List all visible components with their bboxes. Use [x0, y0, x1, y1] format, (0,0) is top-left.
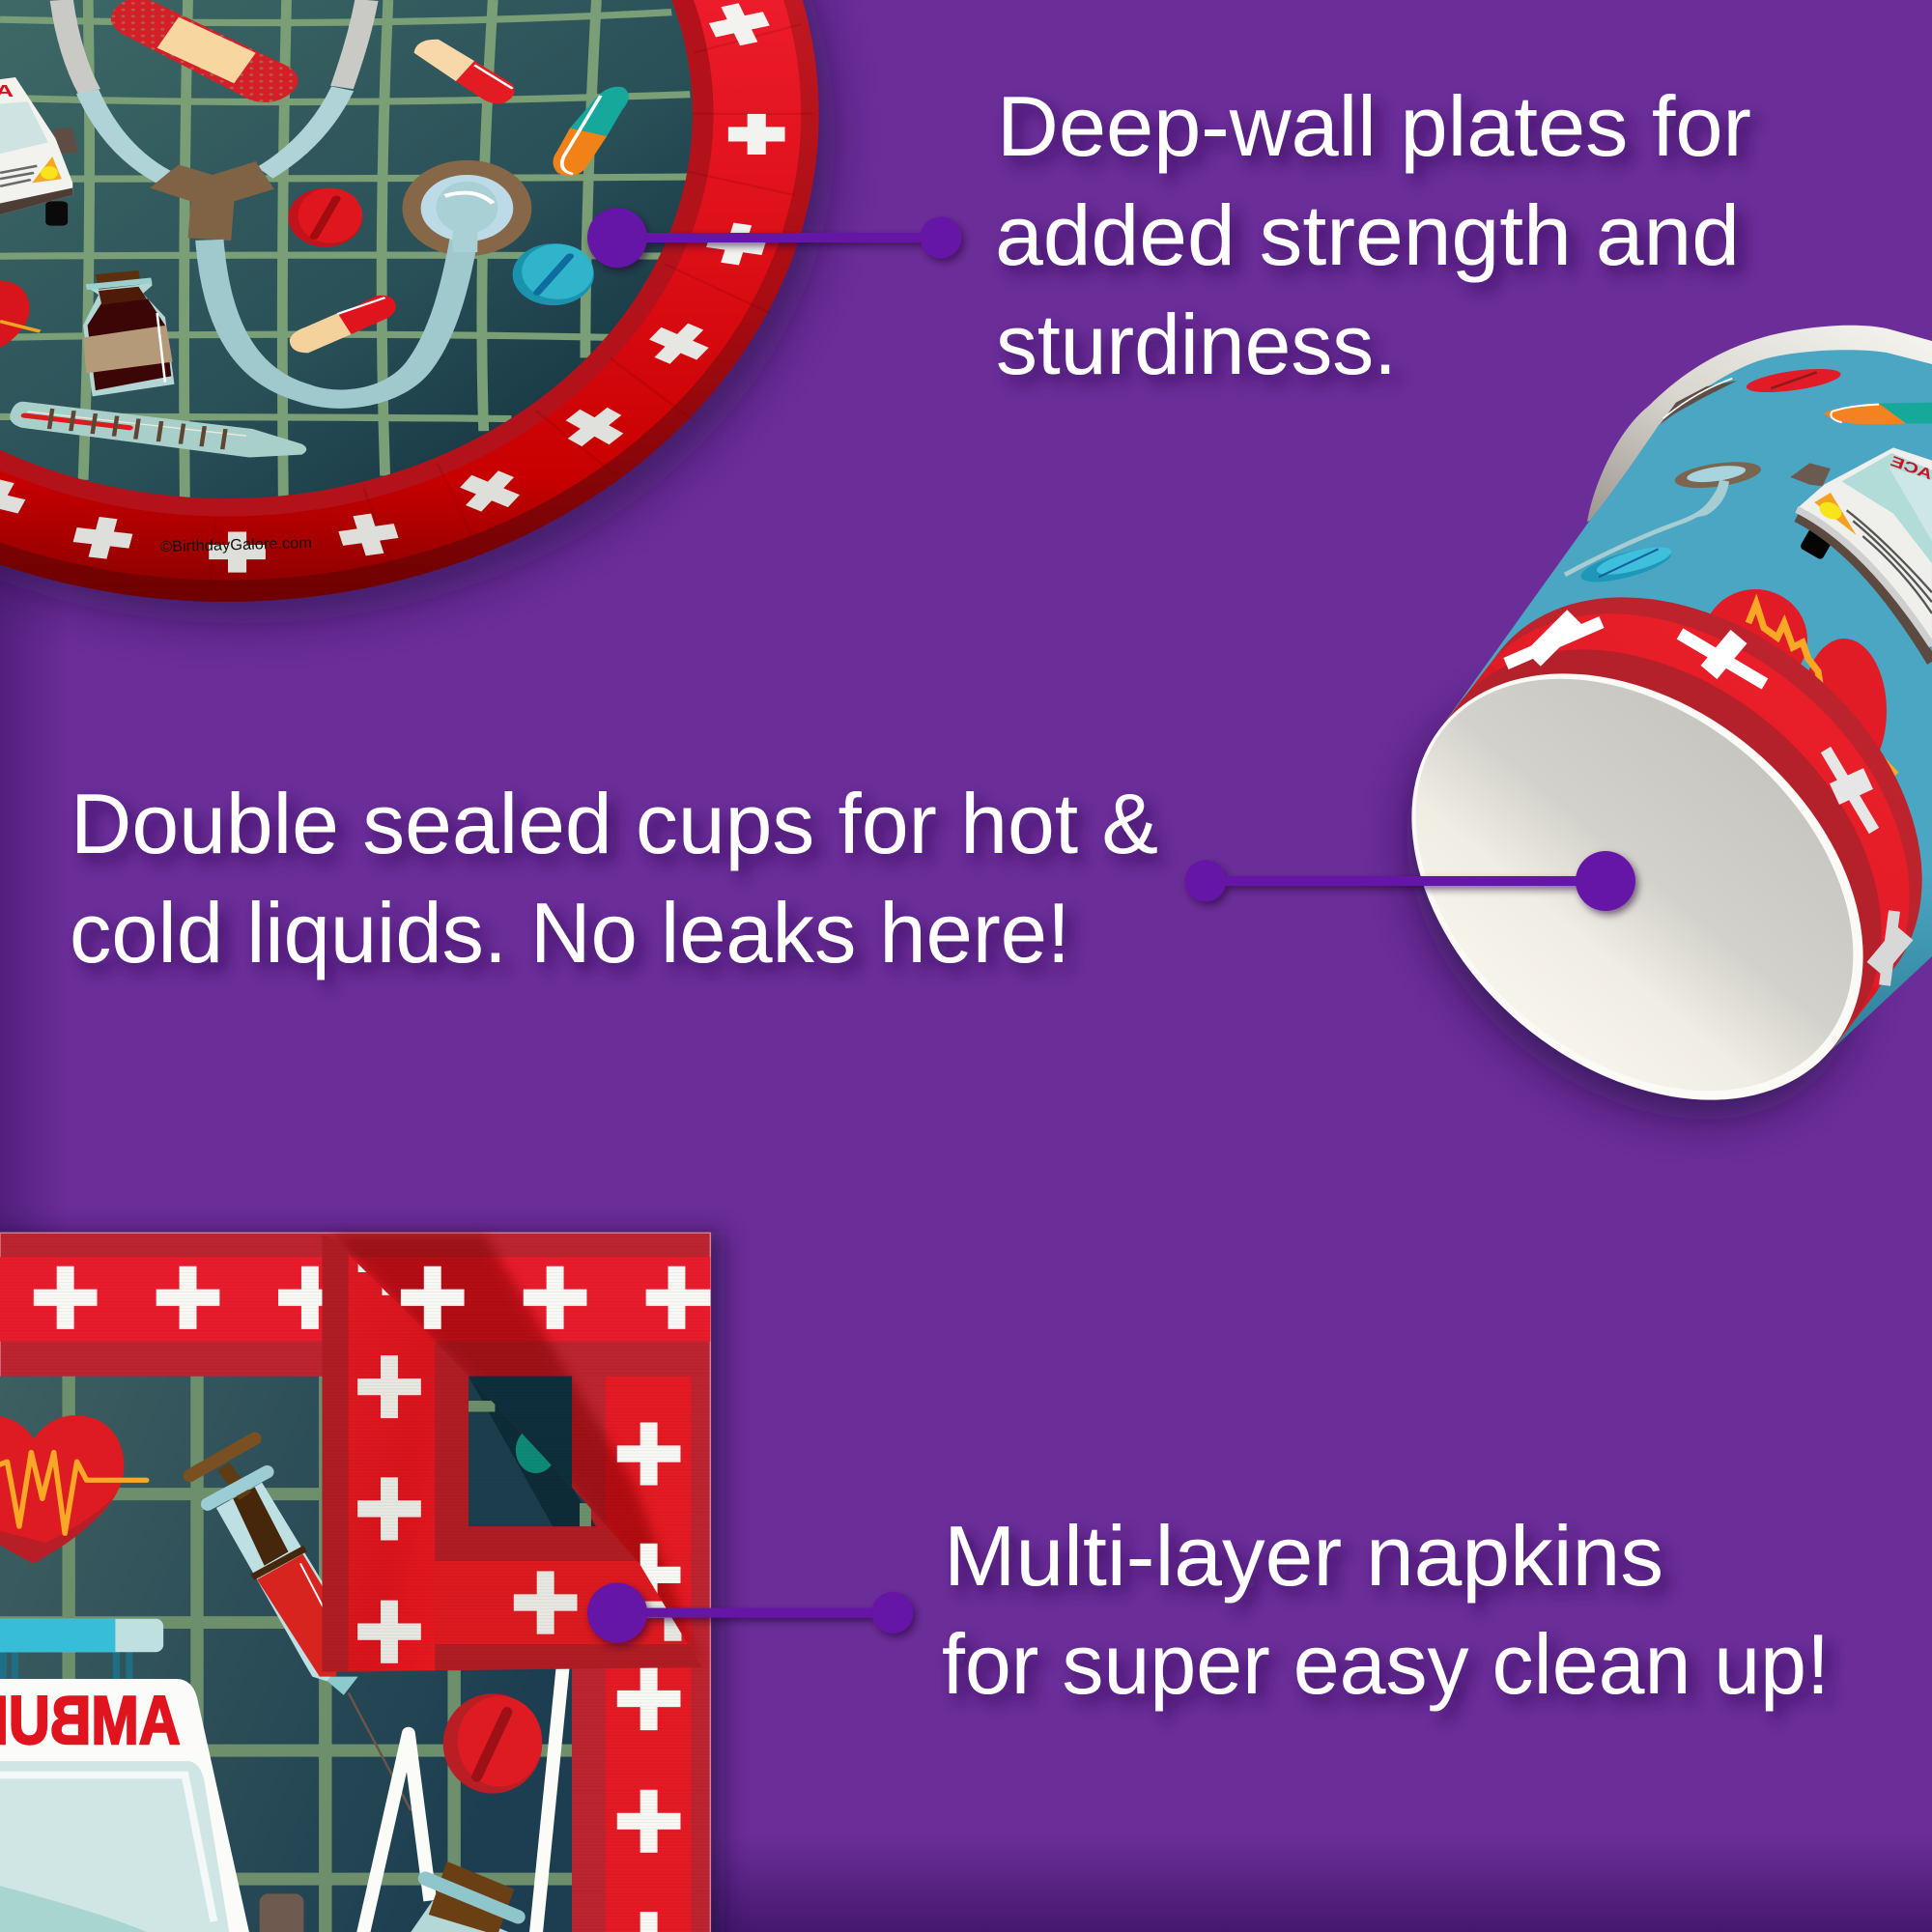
panel: paper plate: [0, 0, 835, 623]
icon: teal and orange capsule: [553, 87, 629, 176]
cup body: [1443, 350, 1932, 1050]
icon: orange capsule on cup: [1824, 403, 1932, 424]
cup base: [1328, 586, 1932, 1187]
icon: ambulance on napkin: [0, 1679, 250, 1932]
plate inner wall ring: [0, 0, 714, 517]
icon: stethoscope on cup: [1565, 458, 1763, 575]
icon: blue tablet: [513, 243, 594, 305]
icon: heart: [0, 280, 40, 348]
icon: ambulance: [0, 77, 78, 226]
text block: napkins: Multi-layer napkins: [944, 1508, 1663, 1604]
fold shadow: [331, 1236, 701, 1667]
panel: paper cup: [1323, 326, 1932, 1207]
folded napkin corner: [322, 1233, 706, 1677]
icon: heart on cup: [1703, 589, 1896, 783]
plate rim pleats: [210, 24, 813, 594]
napkin texture: [0, 1233, 710, 1932]
callout: napkin connector: [587, 1582, 914, 1642]
text block: plates: sturdiness.: [996, 297, 1397, 392]
icon: stretcher bar: [0, 1619, 163, 1680]
icon: white pulse line: [363, 1662, 563, 1932]
icon: thermometer: [10, 402, 306, 458]
callout: plate connector: [587, 208, 962, 268]
icon: bandage: [111, 0, 298, 102]
text block: plates: added strength and: [995, 187, 1740, 283]
icon: blue pill on cup: [1577, 541, 1674, 589]
dish corner behind fold: [469, 1377, 572, 1487]
icon: dark pill on cup: [1660, 379, 1737, 424]
text block: plates: [995, 78, 1751, 392]
plate outer rim: [0, 0, 819, 602]
panel: napkin: [0, 1232, 724, 1932]
cup red band: [1347, 510, 1932, 1163]
napkin shadow: [0, 1232, 724, 1932]
text block: napkins: for super easy clean up!: [942, 1616, 1830, 1712]
icon: brown mirror: [260, 1893, 303, 1932]
cup rolled rim: [1587, 326, 1932, 522]
text block: napkins: [942, 1508, 1830, 1712]
plate artwork: [0, 0, 819, 602]
cup shadow: [1323, 606, 1932, 1207]
napkin top border stripe: [0, 1257, 710, 1342]
text block: plates: Deep-wall plates for: [997, 78, 1751, 174]
plate shadow: [0, 0, 835, 623]
cup printed artwork: [1565, 364, 1932, 662]
text block: cups: Double sealed cups for hot &: [71, 776, 1158, 871]
icon: red tablet: [288, 187, 362, 246]
icon: heart with pulse: [0, 1415, 147, 1563]
plate rim crosses: [0, 0, 785, 573]
napkin right border stripe: [606, 1377, 691, 1932]
napkin artwork: [0, 1233, 710, 1932]
icon: stethoscope: [62, 0, 531, 399]
napkin right border crosses: [617, 1422, 680, 1932]
napkin top border crosses: [34, 1266, 710, 1329]
icon: syringe: [190, 1438, 411, 1810]
icon: medicine bottle: [83, 270, 174, 396]
cup band crosses: [1506, 617, 1905, 985]
napkin base: [0, 1233, 710, 1932]
text block: cups: cold liquids. No leaks here!: [70, 885, 1070, 980]
plate centre design: [0, 0, 702, 504]
plate bright rim band: [0, 0, 801, 581]
napkin centre design: [0, 1377, 572, 1932]
icon: bottle on napkin: [409, 1861, 518, 1932]
icon: red pill on cup: [1745, 364, 1842, 397]
callout: cup connector: [1184, 851, 1635, 911]
icon: red tablet on napkin: [443, 1693, 542, 1794]
icon: ambulance on cup: [1790, 447, 1932, 662]
icon: small red capsule: [290, 296, 396, 353]
icon: cream and red capsule: [414, 40, 515, 104]
text block: cups: [70, 776, 1158, 980]
copyright on plate rim: ©BirthdayGalore.com: [160, 535, 312, 555]
